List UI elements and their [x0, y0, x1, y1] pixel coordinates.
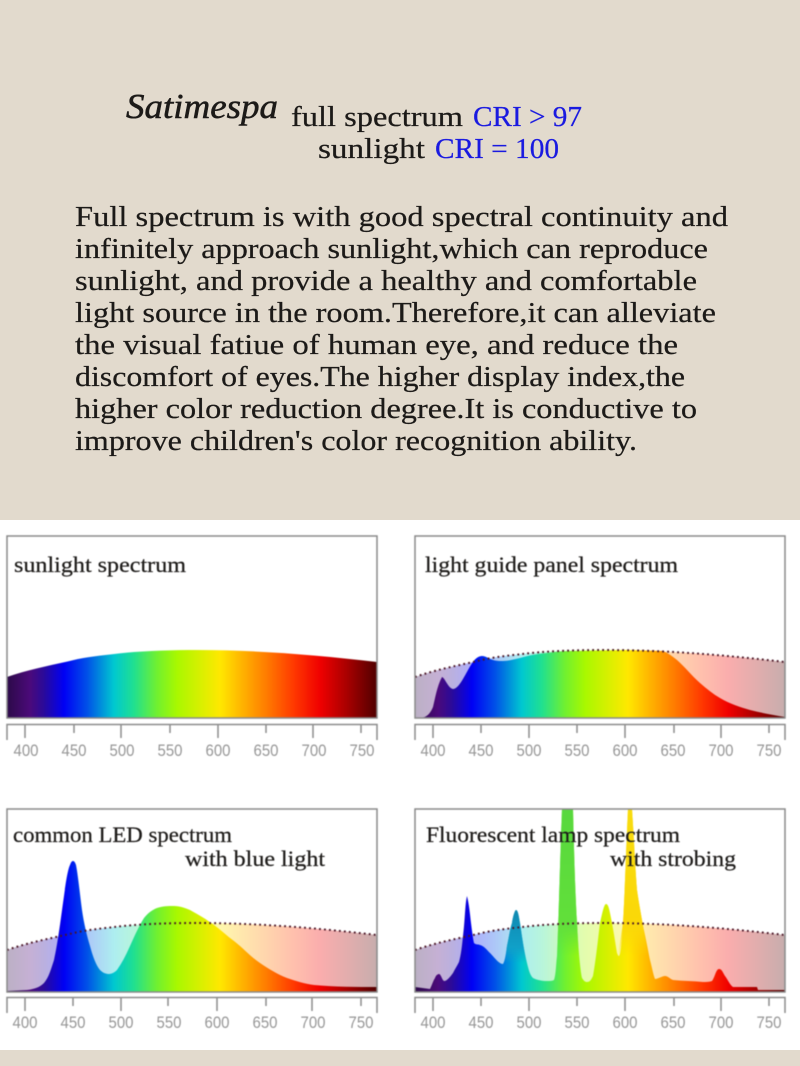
panel: sunlight spectrum: [7, 536, 377, 760]
wavelength axis: 450: [62, 741, 86, 760]
brand wordmark: Satimespa: [126, 87, 278, 126]
panel title: common LED spectrum: [13, 822, 232, 847]
wavelength axis: 600: [204, 1013, 230, 1032]
panel title: sunlight spectrum: [14, 552, 186, 577]
body paragraph: the visual fatiue of human eye, and reduce the: [75, 330, 678, 361]
wavelength axis: [7, 998, 377, 1032]
wavelength axis: 550: [158, 741, 182, 760]
panel title: [13, 822, 325, 871]
wavelength axis: 650: [252, 1013, 278, 1032]
heading: brand and CRI values: [126, 87, 582, 165]
wavelength axis: 550: [564, 741, 590, 760]
spectrum chart: [7, 536, 377, 718]
sunlight CRI line: sunlight: [318, 134, 425, 165]
wavelength axis: 400: [420, 741, 446, 760]
wavelength axis: 650: [254, 741, 278, 760]
wavelength axis: 750: [756, 1013, 782, 1032]
wavelength axis: 750: [350, 741, 374, 760]
wavelength axis: [415, 998, 785, 1032]
body paragraph: discomfort of eyes.The higher display index,the: [75, 362, 685, 393]
wavelength axis: 400: [420, 1013, 446, 1032]
wavelength axis: 650: [660, 741, 686, 760]
body paragraph: sunlight, and provide a healthy and comfortable: [75, 266, 697, 297]
wavelength axis: 450: [60, 1013, 86, 1032]
wavelength axis: 500: [110, 741, 134, 760]
wavelength axis: 600: [206, 741, 230, 760]
spectrum chart: [7, 809, 377, 992]
panel title: light guide panel spectrum: [425, 552, 678, 577]
wavelength axis: 400: [14, 741, 38, 760]
wavelength axis: 600: [612, 741, 638, 760]
spectrum chart: [415, 536, 785, 718]
wavelength axis: 650: [660, 1013, 686, 1032]
panel: fluorescent lamp spectrum: [415, 809, 785, 1032]
white chart area: [0, 520, 800, 1050]
wavelength axis: 700: [302, 741, 326, 760]
full spectrum CRI line: full spectrum: [291, 102, 463, 133]
wavelength axis: 700: [708, 1013, 734, 1032]
wavelength axis: 500: [108, 1013, 134, 1032]
panel title: Fluorescent lamp spectrum: [426, 822, 680, 847]
body paragraph: infinitely approach sunlight,which can reproduce: [75, 234, 708, 265]
wavelength axis: [7, 724, 377, 760]
panel: light guide panel spectrum: [415, 536, 785, 760]
peak tints: [505, 809, 648, 963]
full spectrum CRI line: CRI > 97: [473, 102, 582, 133]
panel title: with strobing: [610, 846, 736, 871]
wavelength axis: 700: [300, 1013, 326, 1032]
panel: common LED spectrum: [7, 809, 377, 1032]
wavelength axis: 700: [708, 741, 734, 760]
wavelength axis: 450: [468, 1013, 494, 1032]
panel title: [426, 822, 736, 871]
wavelength axis: 750: [348, 1013, 374, 1032]
body paragraph: Full spectrum is with good spectral continuity and: [75, 202, 728, 233]
wavelength axis: 500: [516, 1013, 542, 1032]
body paragraph: [75, 202, 728, 457]
wavelength axis: 600: [612, 1013, 638, 1032]
wavelength axis: 450: [468, 741, 494, 760]
full spectrum CRI line: [291, 102, 582, 133]
wavelength axis: 750: [756, 741, 782, 760]
body paragraph: improve children's color recognition ability.: [75, 426, 637, 457]
wavelength axis: 500: [516, 741, 542, 760]
wavelength axis: 400: [12, 1013, 38, 1032]
body paragraph: higher color reduction degree.It is conductive to: [75, 394, 697, 425]
spectrum chart: [415, 809, 785, 992]
panel title: with blue light: [185, 846, 325, 871]
wavelength axis: 550: [564, 1013, 590, 1032]
sunlight CRI line: CRI = 100: [435, 134, 559, 165]
wavelength axis: 550: [156, 1013, 182, 1032]
wavelength axis: [415, 724, 785, 760]
sunlight CRI line: [318, 134, 559, 165]
body paragraph: light source in the room.Therefore,it can alleviate: [75, 298, 716, 329]
